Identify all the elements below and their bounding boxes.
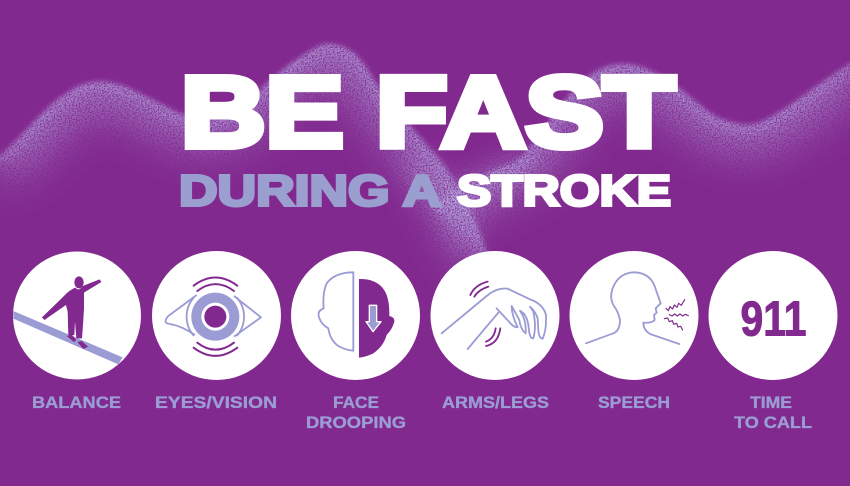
label: face: FACE [333, 393, 379, 412]
icon: eye [166, 277, 261, 356]
panel: time to call [708, 251, 838, 432]
label: arms/legs: ARMS/LEGS [442, 393, 549, 412]
label: speech: SPEECH [598, 393, 670, 412]
time circle [708, 251, 838, 380]
panel: balance [13, 252, 141, 412]
label: drooping: DROOPING [306, 413, 406, 432]
panel: speech [570, 251, 698, 412]
label: to call: TO CALL [734, 413, 812, 432]
subtitle: during a stroke [179, 166, 671, 216]
panel: eyes/vision [152, 251, 281, 412]
number: 911: 911 [740, 292, 806, 346]
eyes circle [152, 251, 281, 380]
grainy wave background [0, 44, 850, 260]
face circle [291, 251, 420, 380]
label: time: TIME [750, 393, 792, 412]
subtitle part: during a: DURING A [179, 166, 441, 216]
title: BE FAST: BE FAST [181, 56, 675, 168]
icon: person on a tightrope [13, 276, 123, 364]
speech circle [570, 251, 698, 380]
arms circle [430, 251, 560, 380]
icon: half face with down arrow [319, 272, 394, 358]
label: balance: BALANCE [32, 393, 121, 412]
label: eyes/vision: EYES/VISION [155, 393, 277, 412]
subtitle part: stroke: STROKE [457, 166, 671, 216]
icon: drooping arm and hand [442, 282, 546, 349]
panel: arms/legs [430, 251, 560, 412]
panel: face drooping [291, 251, 420, 432]
balance circle [13, 252, 141, 380]
icon: head speaking [586, 272, 688, 344]
